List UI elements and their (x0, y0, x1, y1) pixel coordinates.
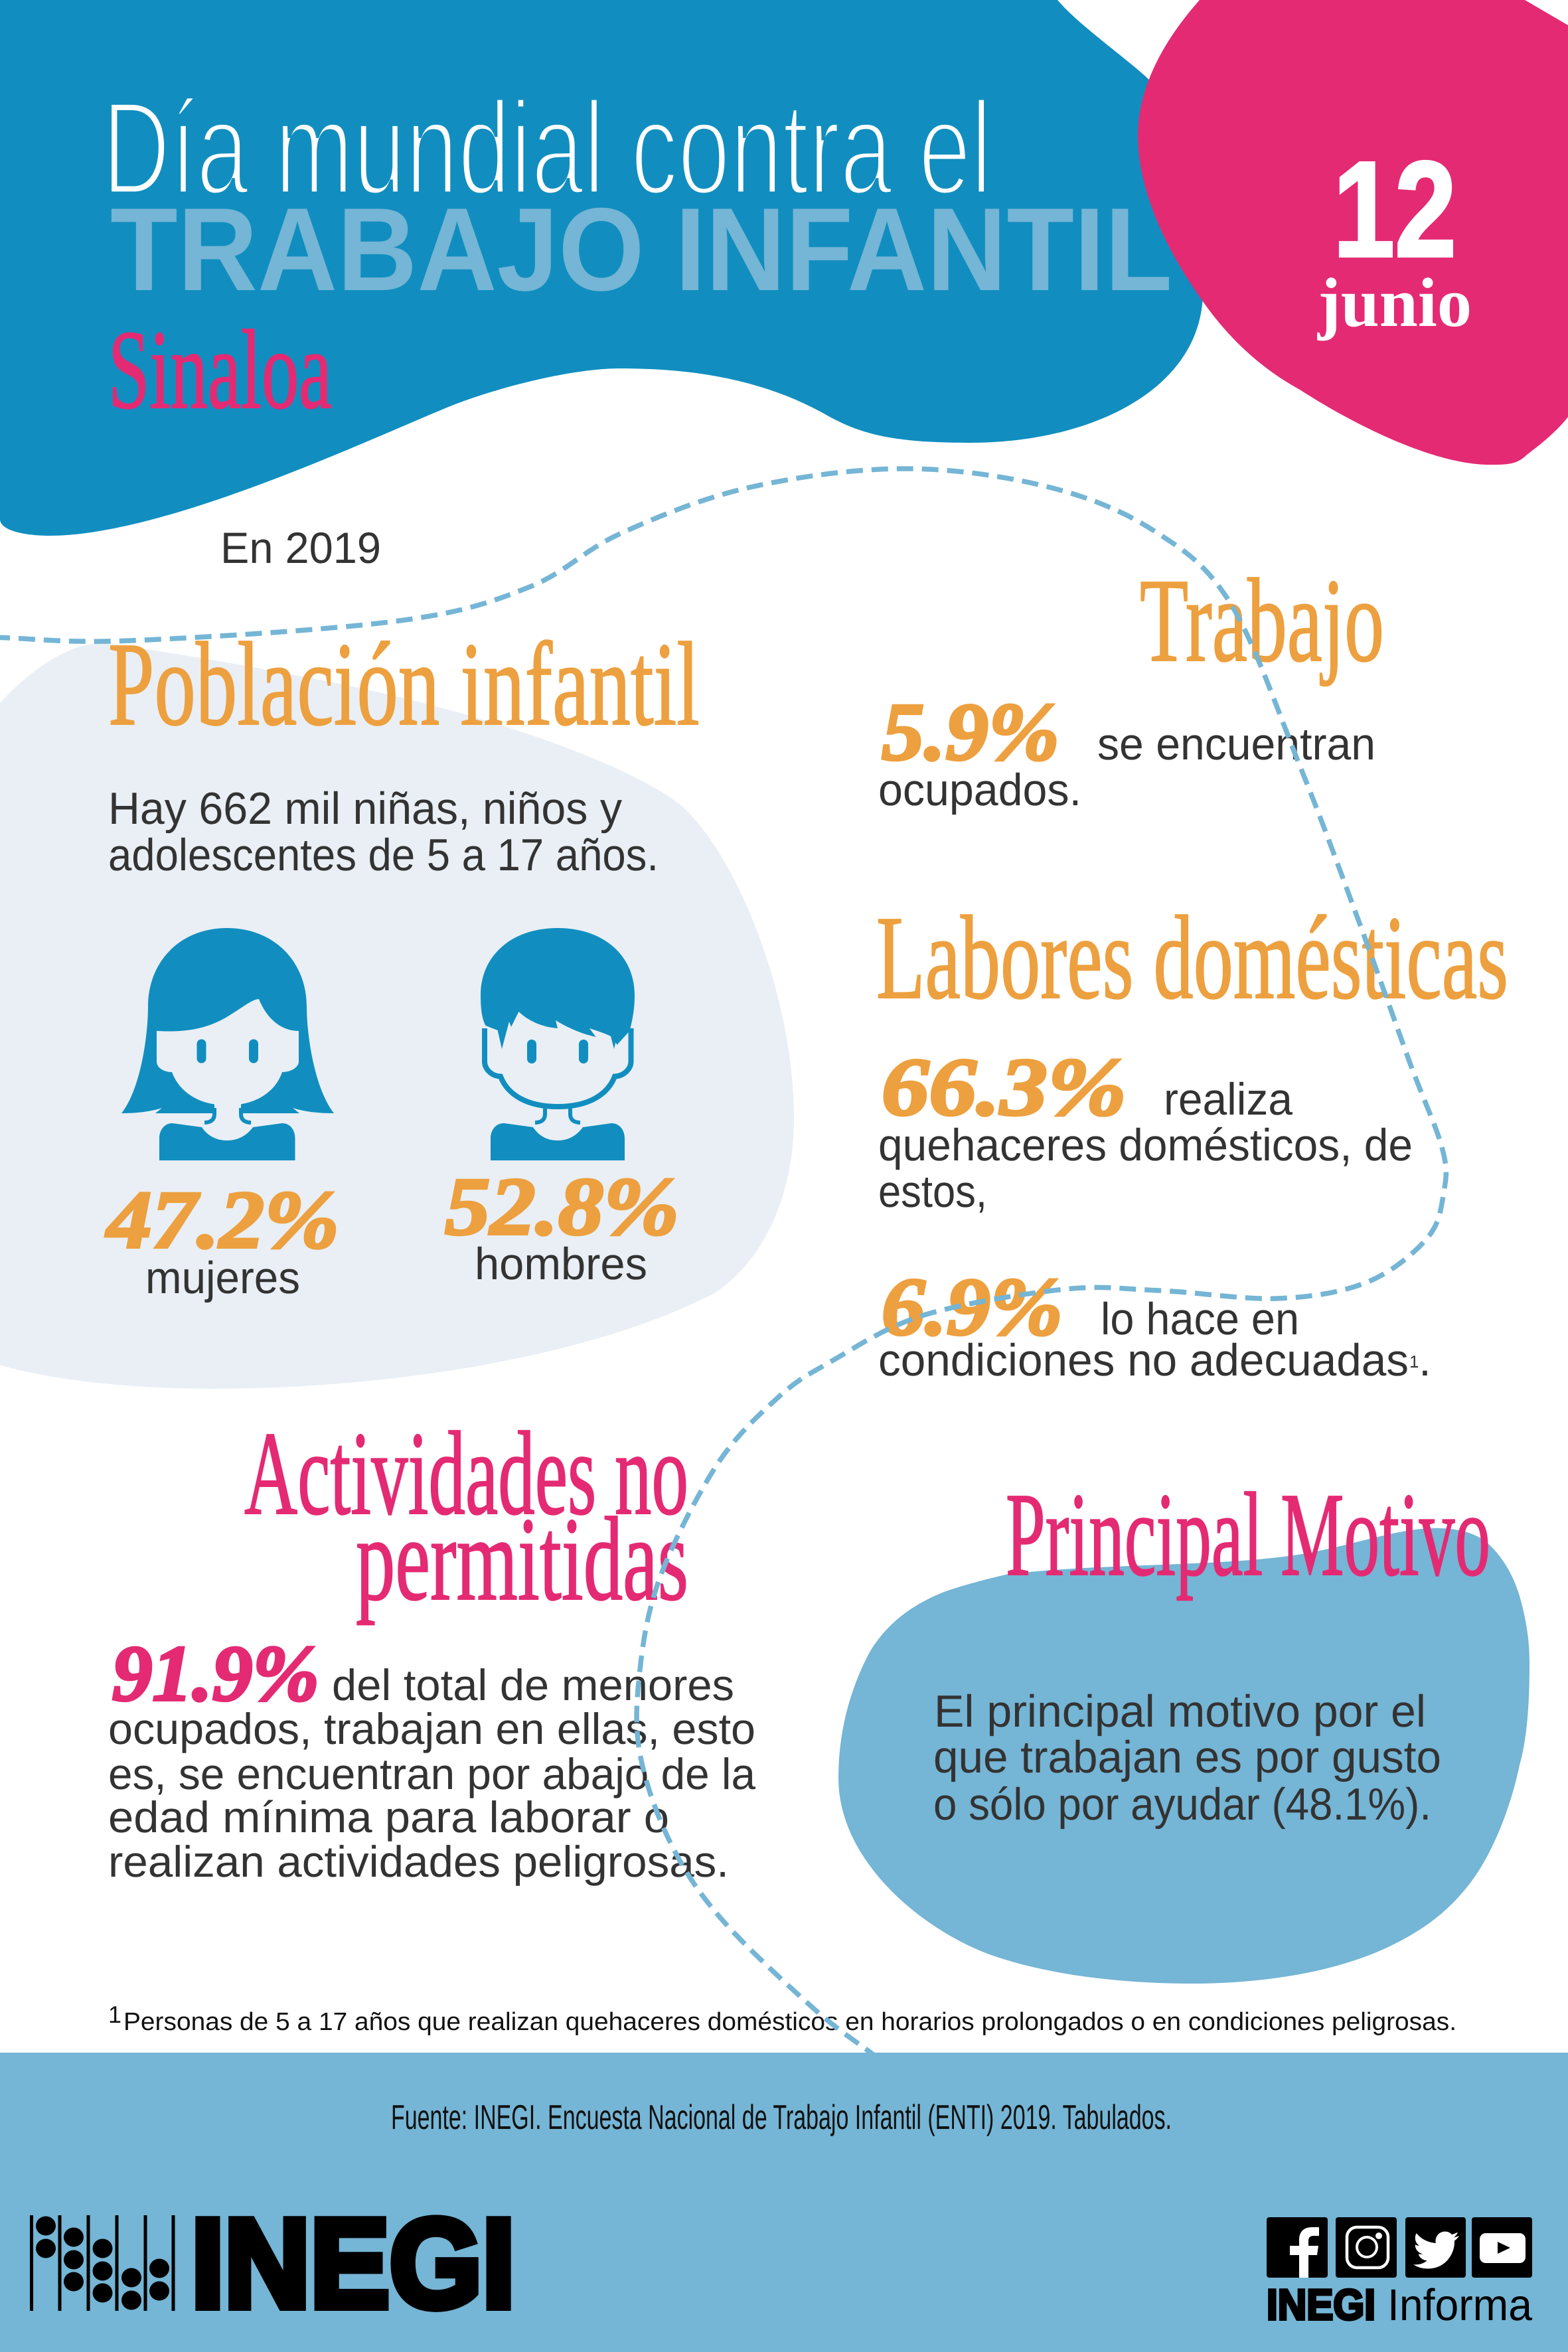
text block: . (1419, 1335, 1431, 1385)
section: actividades no permitidas (108, 1407, 755, 1886)
source text: Fuente: INEGI. Encuesta Nacional de Trabajo Infantil (ENTI) 2019. Tabulados. (391, 2098, 1172, 2137)
panel: date pink blob (1138, 0, 1568, 465)
text: En 2019: En 2019 (220, 523, 381, 572)
heading: permitidas (356, 1493, 688, 1625)
text block (108, 1660, 755, 1886)
text block: estos, (878, 1166, 987, 1217)
logo: INEGI small wordmark: INEGI (1267, 2280, 1375, 2329)
stat: 52.8% hombres: 52.8% (445, 1161, 679, 1252)
section: labores domésticas (876, 892, 1508, 1385)
heading (244, 1407, 688, 1625)
text block: ocupados. (878, 765, 1081, 815)
text block: realizan actividades peligrosas. (108, 1837, 729, 1886)
text block: es, se encuentran por abajo de la (108, 1749, 755, 1798)
heading: Población infantil (108, 618, 700, 750)
dashed connector line (0, 469, 1446, 2058)
text block: quehaceres domésticos, de (878, 1120, 1413, 1170)
stat: 47.2% mujeres (106, 1174, 339, 1303)
heading: Actividades no (244, 1407, 688, 1539)
logo: INEGI wordmark: INEGI (191, 2193, 515, 2334)
stat: 47.2% mujeres: 47.2% (106, 1174, 339, 1265)
icon: twitter (1405, 2217, 1466, 2278)
panel: header blue blob (0, 0, 1203, 536)
panel: población infantil grey blob (0, 643, 794, 1389)
logo: INEGI abacus (30, 2215, 175, 2311)
text block (878, 1074, 1413, 1217)
section: trabajo (878, 554, 1384, 815)
panel: footer band (0, 2053, 1568, 2352)
text block: edad mínima para laborar o (108, 1792, 669, 1842)
text block: se encuentran (1097, 719, 1375, 769)
text block: condiciones no adecuadas (878, 1335, 1409, 1385)
stat: 47.2% mujeres: mujeres (145, 1253, 300, 1303)
text block: que trabajan es por gusto (933, 1732, 1441, 1782)
text block (933, 1686, 1441, 1830)
text block (878, 1294, 1431, 1385)
text block: del total de menores (332, 1660, 734, 1709)
date month: junio (1317, 264, 1472, 341)
heading: Trabajo (1140, 554, 1384, 686)
text block: El principal motivo por el (934, 1686, 1426, 1737)
icon: girl (121, 928, 334, 1160)
title: Trabajo infantil: TRABAJO INFANTIL (110, 183, 1172, 315)
stat: 52.8% hombres: hombres (475, 1239, 647, 1289)
footnote: Personas de 5 a 17 años que realizan quehaceres domésticos en horarios prolongados o en condiciones peligrosas. (123, 2008, 1456, 2036)
text block: realiza (1164, 1074, 1293, 1125)
icon: youtube (1472, 2217, 1532, 2278)
section: población infantil (106, 618, 700, 1303)
text block (108, 783, 659, 880)
date number: 12 (1333, 133, 1456, 285)
text block (878, 719, 1375, 815)
text block: adolescentes de 5 a 17 años. (108, 830, 659, 880)
stat: 6.9%: 6.9% (882, 1261, 1063, 1352)
icon: boy (481, 928, 635, 1160)
icon: instagram (1336, 2217, 1397, 2278)
icon: facebook (1267, 2217, 1328, 2278)
stat: 91.9%: 91.9% (112, 1629, 319, 1717)
footnote: 1 (108, 2001, 121, 2028)
text block: Hay 662 mil niñas, niños y (108, 783, 622, 834)
stat: 5.9%: 5.9% (882, 686, 1059, 777)
stat: 52.8% hombres (445, 1161, 679, 1289)
subtitle: Sinaloa: Sinaloa (108, 307, 332, 432)
panel: principal motivo blue blob (838, 1528, 1529, 1984)
text block: o sólo por ayudar (48.1%). (933, 1779, 1431, 1830)
title: Día mundial contra el: Día mundial contra el (102, 74, 992, 222)
section: principal motivo (933, 1468, 1490, 1830)
text block: lo hace en (1101, 1294, 1299, 1344)
stat: 66.3%: 66.3% (882, 1042, 1127, 1133)
text block: 1 (1409, 1352, 1419, 1372)
text: Informa: Informa (1387, 2280, 1533, 2330)
text block: ocupados, trabajan en ellas, esto (108, 1704, 755, 1753)
